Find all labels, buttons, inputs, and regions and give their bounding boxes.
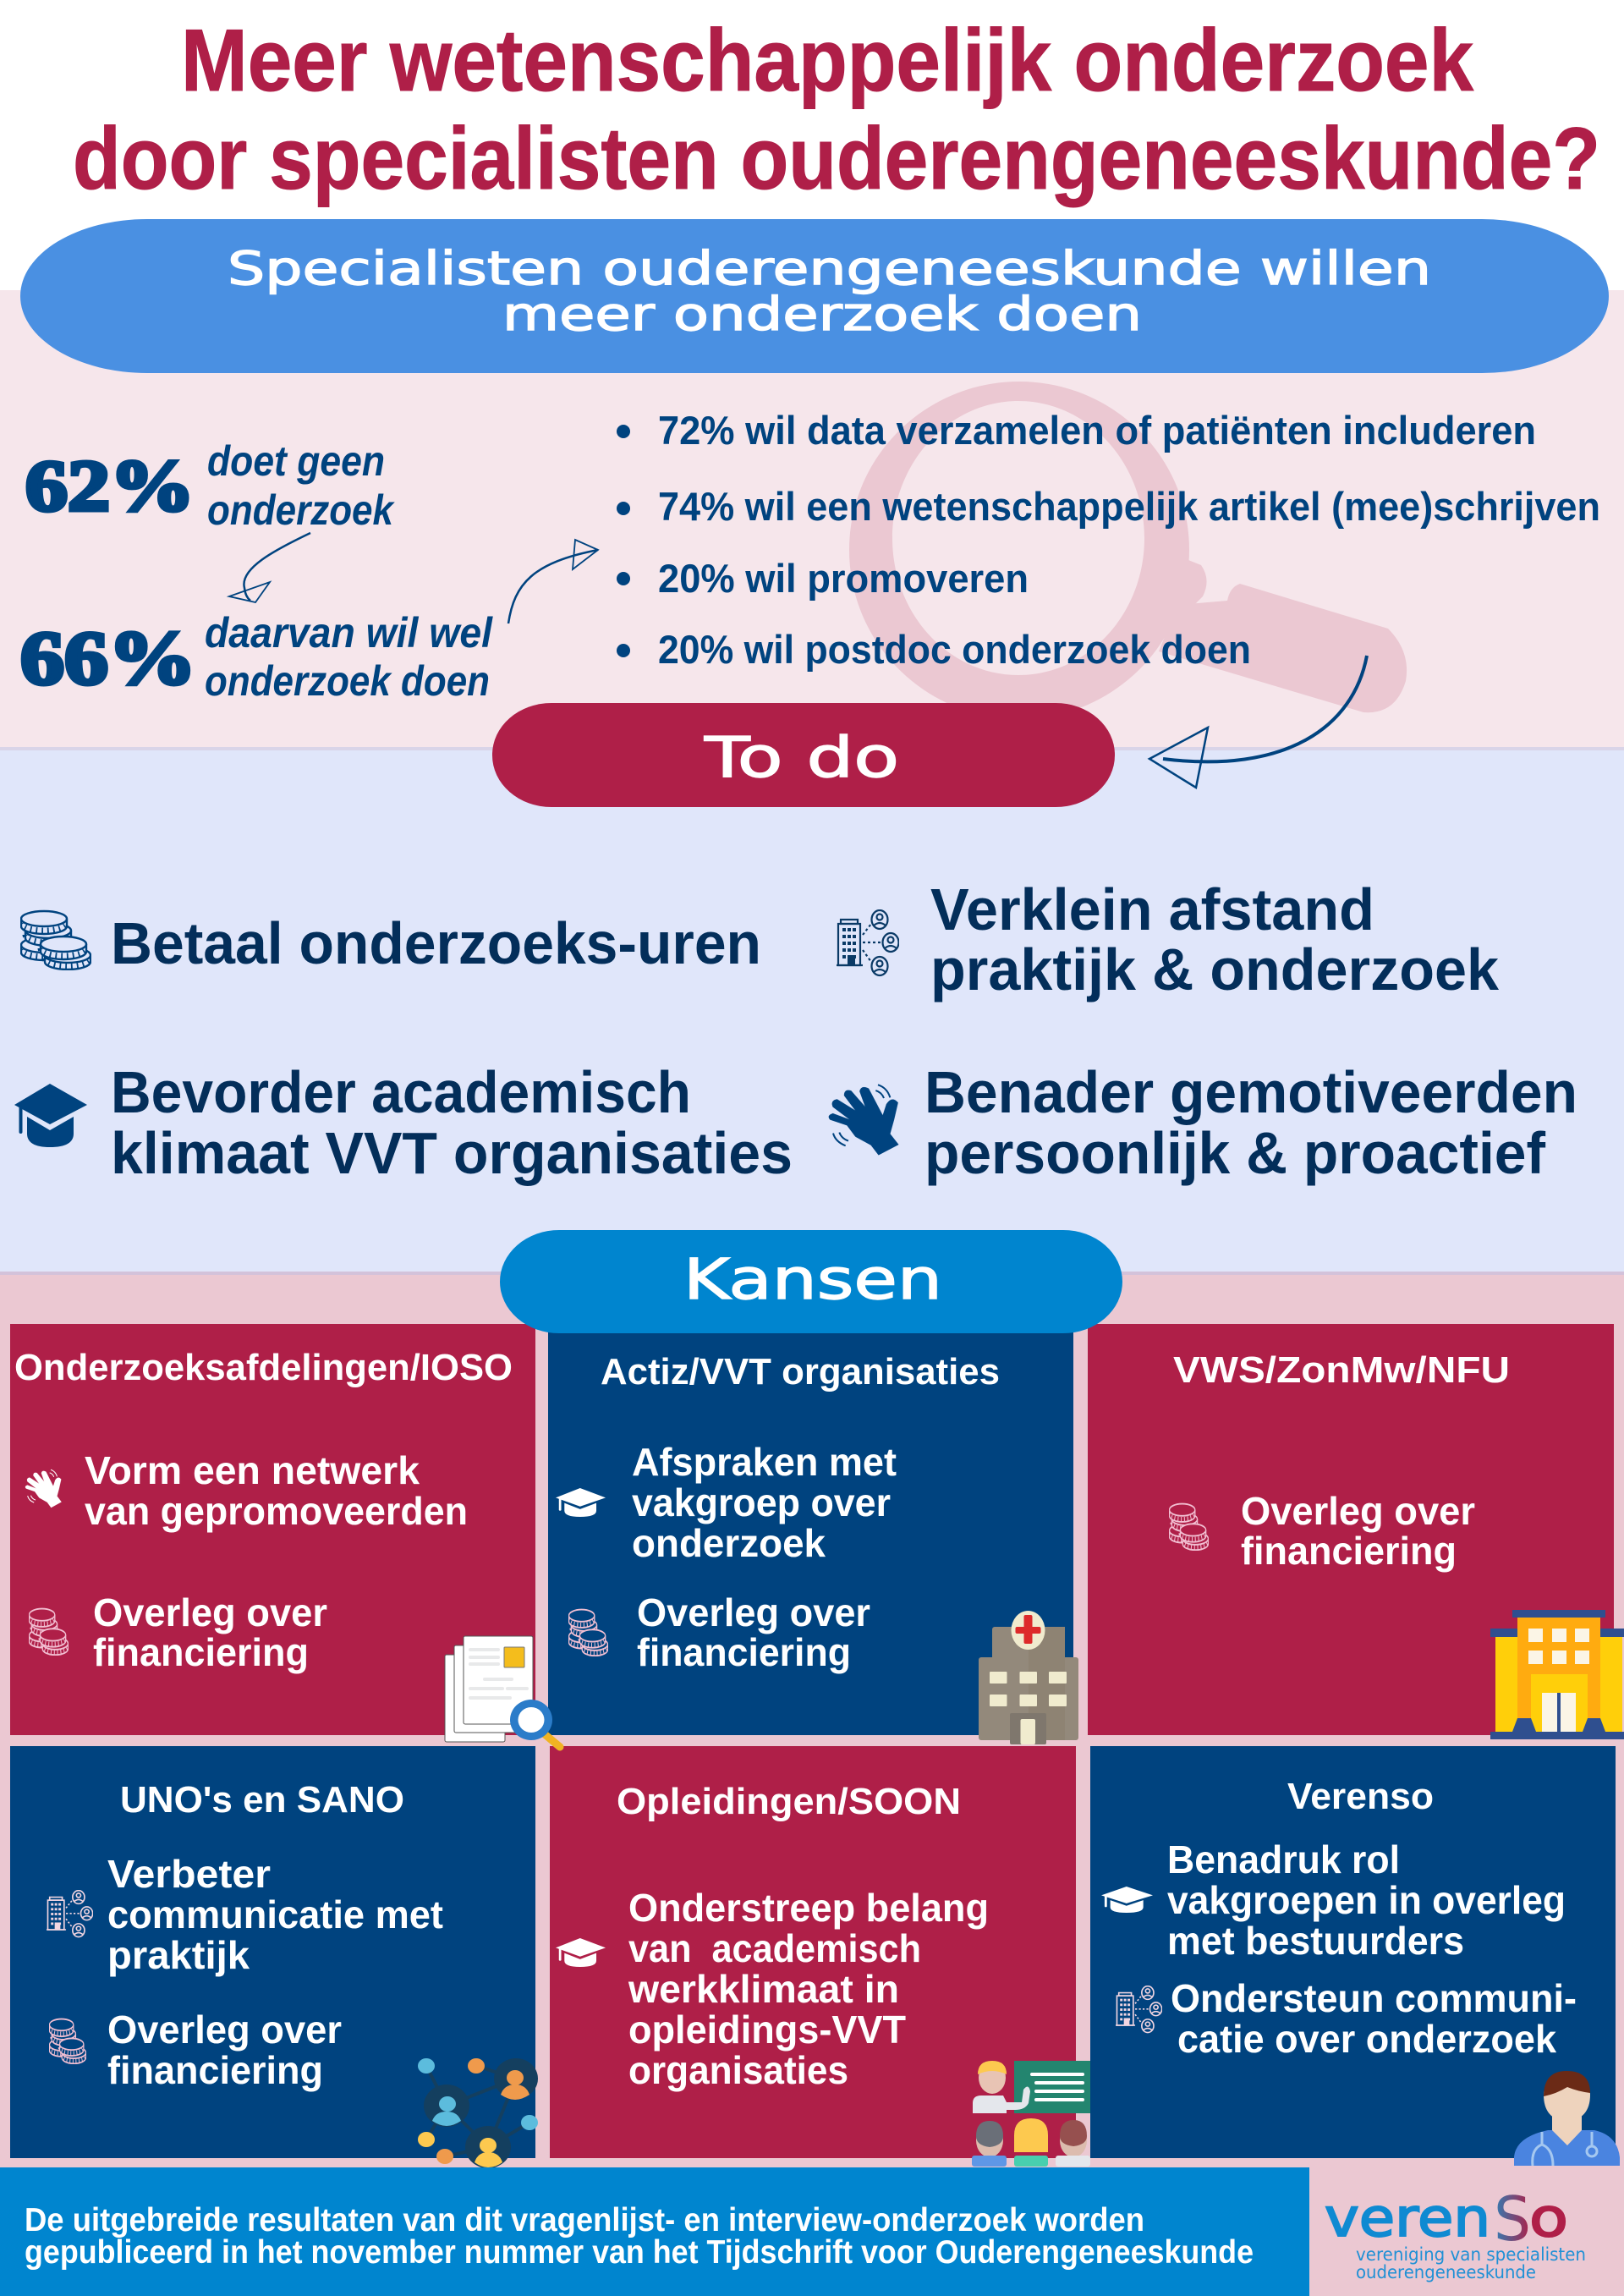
to do: pay research hours: Betaal onderzoeks-uren (111, 910, 761, 976)
panel: Actiz/VVT organisaties: Actiz/VVT organisaties (601, 1351, 1000, 1392)
banner: specialists want more research: meer onderzoek doen (502, 288, 1142, 341)
to do: reduce distance: Verklein afstand (930, 876, 1374, 942)
panel: Verenso: Benadruk rol (1167, 1837, 1400, 1881)
panel: Onderzoeksafdelingen/IOSO (10, 1324, 535, 1735)
illustration: teacher and students (972, 2061, 1090, 2167)
panel: UNO's en SANO: Verbeter (107, 1852, 271, 1896)
panel: Onderzoeksafdelingen/IOSO: Overleg over (93, 1590, 327, 1634)
panel: Actiz/VVT organisaties (548, 1328, 1073, 1735)
illustration: doctor (1514, 2071, 1620, 2166)
arrow: from 62% to 66% (229, 533, 310, 602)
panel: UNO's en SANO: praktijk (107, 1933, 250, 1977)
banner: specialists want more research (20, 219, 1609, 373)
illustration: documents with magnifier (445, 1636, 560, 1747)
illustration: hospital (979, 1611, 1078, 1744)
panel: Onderzoeksafdelingen/IOSO: Vorm een netwerk (85, 1448, 420, 1492)
panel: Verenso: Ondersteun communi- (1171, 1976, 1577, 2020)
panel: UNO's en SANO: communicatie met (107, 1892, 443, 1936)
panel: Opleidingen/SOON: organisaties (628, 2048, 848, 2092)
heading pill: Kansen: Kansen (683, 1247, 942, 1312)
to do: approach motivated people (829, 1059, 1577, 1186)
heading pill: To do (492, 703, 1115, 807)
list: research wishes: 74% wil een wetenschappelijk artikel (mee)schrijven (658, 484, 1600, 529)
panel: VWS/ZonMw/NFU: financiering (1241, 1529, 1457, 1573)
icon: large magnifying glass watermark (849, 382, 1407, 719)
illustration: network of people (418, 2058, 538, 2168)
to do: reduce distance (837, 876, 1499, 1002)
title (73, 12, 1600, 208)
panel: Onderzoeksafdelingen/IOSO: financiering (93, 1630, 309, 1674)
heading pill: To do: To do (704, 725, 899, 790)
panel: Actiz/VVT organisaties: vakgroep over (632, 1480, 891, 1524)
logo: Verenso: vereniging van specialisten (1356, 2244, 1586, 2265)
panel: Opleidingen/SOON (550, 1746, 1076, 2158)
to do: reduce distance: praktijk & onderzoek (930, 937, 1499, 1002)
panel: VWS/ZonMw/NFU: Overleg over (1241, 1489, 1475, 1533)
stat: 62%: onderzoek (207, 486, 395, 534)
panel: Actiz/VVT organisaties: Overleg over (637, 1590, 870, 1634)
list: research wishes: 20% wil postdoc onderzoek doen (658, 627, 1251, 672)
list: research wishes: 72% wil data verzamelen of patiënten includeren (658, 408, 1536, 453)
panel: UNO's en SANO (10, 1746, 535, 2158)
to do: academic climate: klimaat VVT organisaties (111, 1120, 793, 1186)
panel: VWS/ZonMw/NFU: VWS/ZonMw/NFU (1173, 1349, 1510, 1391)
to do: approach motivated people: Benader gemotiveerden (924, 1059, 1577, 1125)
arrow: from 66% to list (508, 540, 598, 623)
panel: Actiz/VVT organisaties: Afspraken met (632, 1440, 897, 1484)
panel: Verenso: Verenso (1287, 1776, 1434, 1817)
footer: publication note: gepubliceerd in het november nummer van het Tijdschrift voor Ouderengeneeskunde (25, 2234, 1254, 2271)
panel: Opleidingen/SOON: opleidings-VVT (628, 2008, 906, 2052)
list: research wishes: 20% wil promoveren (658, 556, 1029, 601)
panel: Onderzoeksafdelingen/IOSO: van gepromoveerden (85, 1489, 468, 1533)
panel: Verenso (1090, 1746, 1616, 2158)
panel: VWS/ZonMw/NFU (1088, 1324, 1614, 1735)
footer: publication note (0, 2167, 1309, 2296)
stat: 62% (25, 437, 395, 534)
panel: UNO's en SANO: UNO's en SANO (120, 1779, 404, 1821)
panel: Actiz/VVT organisaties: financiering (637, 1630, 851, 1674)
panel: Verenso: vakgroepen in overleg (1167, 1878, 1566, 1922)
panel: Actiz/VVT organisaties: onderzoek (632, 1521, 826, 1565)
logo: Verenso: ouderengeneeskunde (1356, 2262, 1536, 2282)
stat: 66%: 66% (20, 617, 196, 700)
panel: Opleidingen/SOON: werkklimaat in (628, 1967, 899, 2011)
list: research wishes (617, 408, 1600, 672)
stat: 66%: onderzoek doen (205, 657, 490, 705)
logo: Verenso: veren (1325, 2187, 1490, 2249)
panel: Opleidingen/SOON: van academisch (628, 1926, 921, 1970)
logo: Verenso: S (1494, 2183, 1531, 2255)
stat: 66% (20, 609, 493, 705)
panel: Verenso: met bestuurders (1167, 1919, 1464, 1963)
panel: UNO's en SANO: financiering (107, 2048, 323, 2092)
heading pill: Kansen (500, 1230, 1122, 1333)
panel: Onderzoeksafdelingen/IOSO: Onderzoeksafdelingen/IOSO (14, 1347, 513, 1388)
banner: specialists want more research: Specialisten ouderengeneeskunde willen (228, 242, 1431, 295)
to do: approach motivated people: persoonlijk & proactief (924, 1120, 1546, 1186)
illustration: yellow building (1490, 1610, 1624, 1739)
arrow: from magnifier to To do (1149, 656, 1367, 788)
stat: 62%: doet geen (207, 437, 385, 485)
to do: academic climate: Bevorder academisch (111, 1059, 691, 1125)
stat: 62%: 62% (25, 445, 195, 526)
stat: 66%: daarvan wil wel (205, 609, 493, 656)
logo: Verenso: o (1529, 2187, 1568, 2249)
to do: academic climate (14, 1059, 793, 1186)
logo: Verenso (1325, 2183, 1586, 2282)
title: Meer wetenschappelijk onderzoek (181, 12, 1473, 110)
panel: UNO's en SANO: Overleg over (107, 2008, 342, 2052)
panel: Verenso: catie over onderzoek (1177, 2017, 1556, 2061)
panel: Opleidingen/SOON: Opleidingen/SOON (617, 1781, 961, 1822)
panel: Opleidingen/SOON: Onderstreep belang (628, 1886, 989, 1930)
footer: publication note: De uitgebreide resultaten van dit vragenlijst- en interview-onderzoek worden (25, 2202, 1144, 2238)
